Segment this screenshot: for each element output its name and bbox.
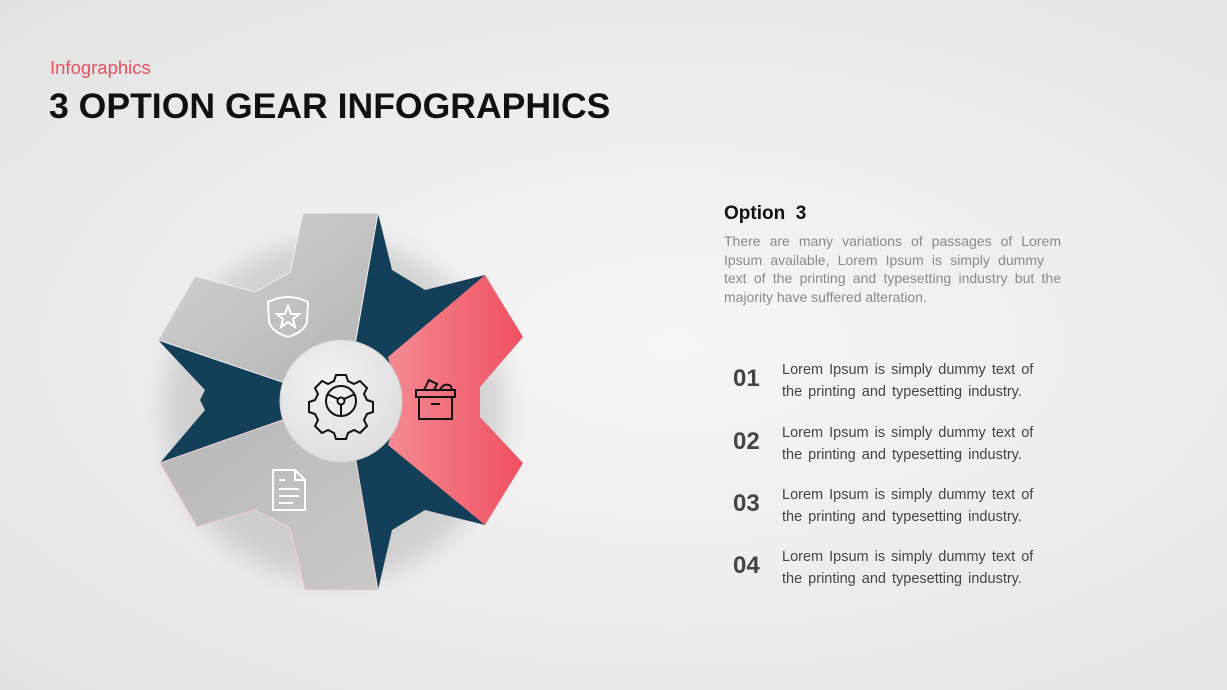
arm: bottom-left gray	[160, 420, 378, 590]
gear shadow	[165, 240, 505, 580]
icon: document	[273, 470, 305, 510]
option description: text of the printing and typesetting industry but the	[724, 270, 1061, 286]
text: Lorem Ipsum is simply dummy text of	[782, 425, 1033, 441]
text: 01	[733, 365, 760, 392]
icon: box	[416, 380, 455, 419]
title: 3 OPTION GEAR INFOGRAPHICS	[49, 86, 610, 126]
item 02	[733, 425, 1034, 463]
dark gear body	[158, 213, 485, 590]
item 04	[733, 549, 1034, 587]
text: 03	[733, 490, 760, 517]
option description	[724, 233, 1061, 305]
icon: shield star	[268, 297, 308, 337]
arm: top-left gray	[158, 213, 378, 382]
option description: There are many variations of passages of Lorem	[724, 233, 1061, 249]
text: the printing and typesetting industry.	[782, 509, 1022, 525]
center circle	[280, 340, 402, 462]
option heading: Option 3	[724, 203, 806, 224]
text: 04	[733, 552, 760, 579]
text: the printing and typesetting industry.	[782, 571, 1022, 587]
subtitle: Infographics	[50, 57, 151, 78]
arm: right red	[388, 275, 523, 525]
text: the printing and typesetting industry.	[782, 447, 1022, 463]
option description: majority have suffered alteration.	[724, 288, 927, 304]
icon: gear steering	[309, 375, 373, 439]
text: Lorem Ipsum is simply dummy text of	[782, 487, 1033, 503]
text: the printing and typesetting industry.	[782, 384, 1022, 400]
item 01	[733, 362, 1034, 400]
item 03	[733, 487, 1034, 525]
text: Lorem Ipsum is simply dummy text of	[782, 549, 1033, 565]
text: 02	[733, 428, 760, 455]
option description: Ipsum available, Lorem Ipsum is simply dummy	[724, 252, 1044, 268]
text: Lorem Ipsum is simply dummy text of	[782, 362, 1033, 378]
